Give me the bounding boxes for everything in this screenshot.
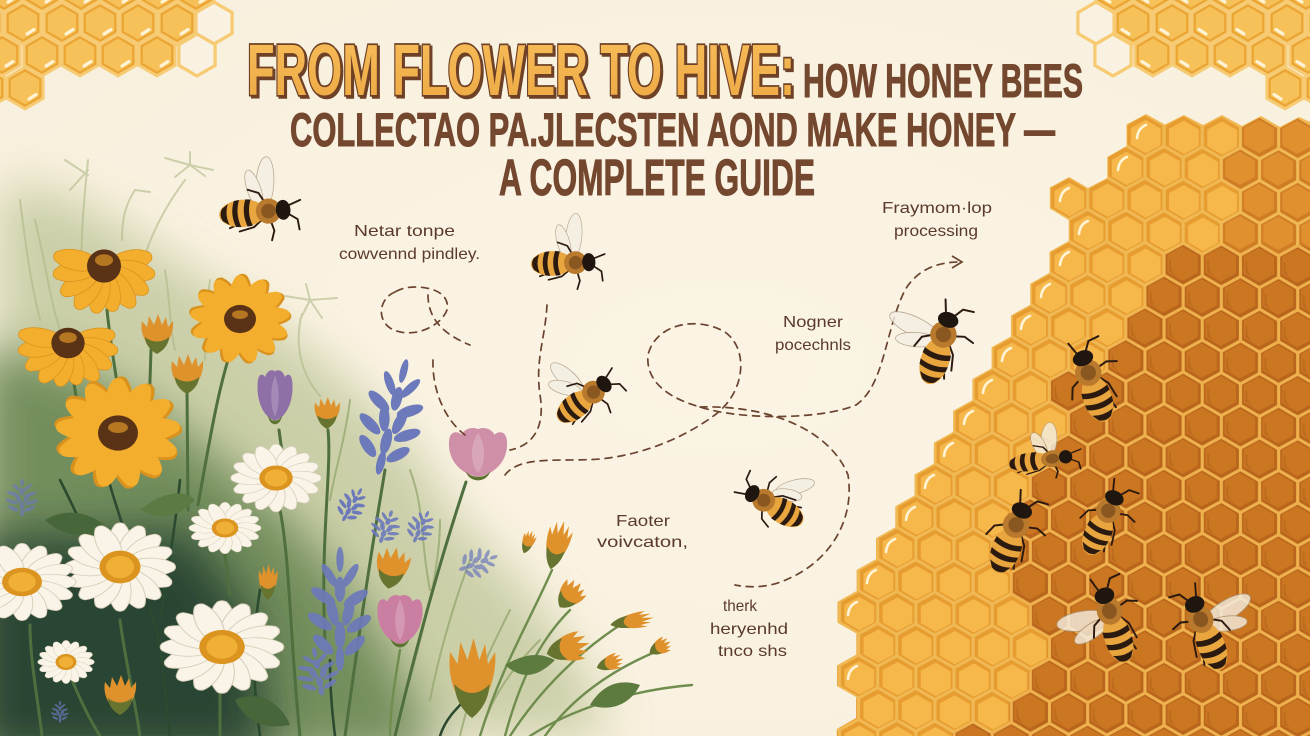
honeycomb corner: top right	[1078, 0, 1310, 111]
cell highlights	[848, 125, 1146, 679]
flight paths	[381, 262, 960, 587]
large honeycomb	[837, 114, 1310, 736]
meadow wash	[0, 187, 610, 736]
label: storage: heryenhd	[710, 621, 788, 638]
label: storage: tnco shs	[718, 643, 787, 660]
flight path arrowhead	[952, 256, 962, 268]
title line 1 remainder: HOW HONEY BEES	[803, 54, 1083, 107]
honeycomb corner: top left	[0, 0, 232, 111]
medium honey cells	[1202, 116, 1310, 258]
label: processing top: Fraymom·lop	[882, 200, 992, 217]
orange buds	[104, 314, 674, 718]
white daisies	[0, 444, 321, 693]
label: nectar: cowvennd pindley.	[339, 246, 480, 263]
bees	[214, 153, 1272, 680]
ghost sprigs	[20, 152, 337, 396]
label: processing top: processing	[894, 223, 978, 240]
yellow flowers	[17, 246, 295, 494]
label: ventilation: voivcaton,	[597, 534, 688, 551]
title line 3: A COMPLETE GUIDE	[499, 149, 815, 206]
title	[247, 31, 1083, 206]
title line 1 shadow: FROM FLOWER TO HIVE:	[249, 33, 797, 113]
leaves	[45, 493, 640, 726]
label: processing middle: Nogner	[783, 314, 844, 331]
lavender spikes	[4, 351, 503, 723]
grass and stems	[30, 310, 692, 736]
meadow	[0, 152, 692, 736]
dark honey cells	[952, 243, 1310, 736]
label: ventilation: Faoter	[616, 513, 671, 530]
tulips	[257, 370, 507, 647]
label: storage: therk	[723, 598, 758, 615]
title line 1 highlight: FROM FLOWER TO HIVE:	[247, 31, 795, 111]
label: nectar: Netar tonpe	[354, 223, 455, 240]
light outer cells	[837, 114, 1310, 736]
label: processing middle: pocechnls	[775, 337, 851, 354]
